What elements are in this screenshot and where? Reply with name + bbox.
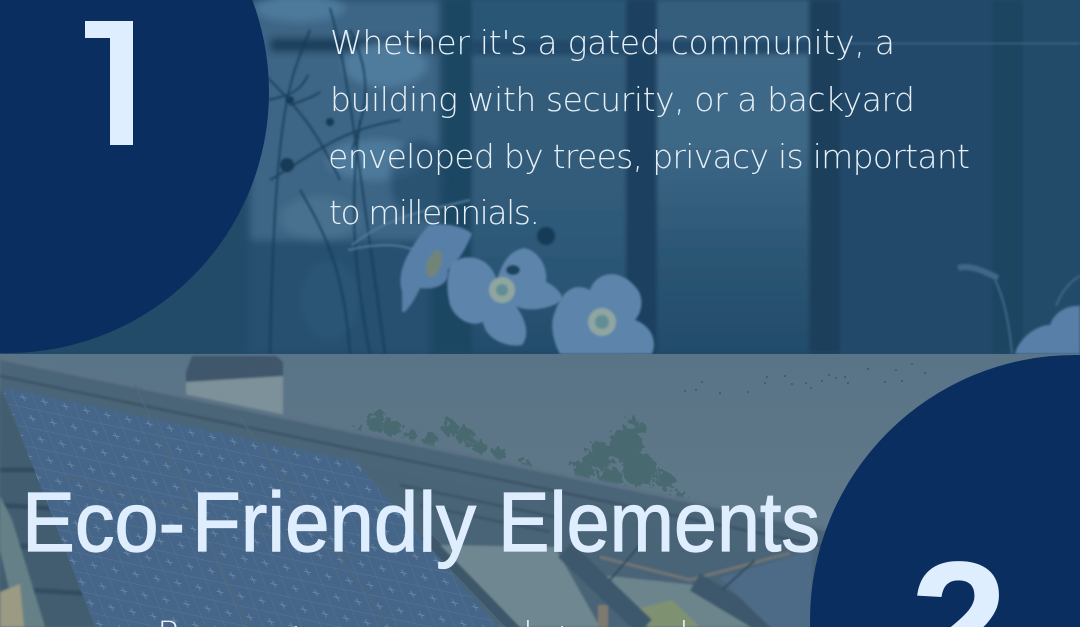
circle: number 2 badge [810, 355, 1080, 627]
flower buds [280, 96, 555, 245]
body text: privacy [328, 23, 970, 232]
pale stem [348, 198, 470, 252]
panel: privacy garden photo [248, 0, 1080, 354]
body text: privacy: Whether it's a gated community, a [330, 23, 895, 62]
heading: eco-friendly elements: Friendly [192, 475, 476, 569]
flower: centre blossom [447, 248, 562, 346]
heading: eco-friendly elements: Elements [498, 475, 820, 569]
heading: eco-friendly elements [22, 475, 820, 569]
solar panels [2, 385, 525, 627]
birds [684, 363, 926, 394]
body text: privacy: building with security, or a backyard [330, 80, 915, 119]
flower: left side blossom [400, 224, 472, 312]
heading: eco-friendly elements: Eco- [22, 475, 185, 569]
body text: privacy: to millennials. [329, 193, 540, 232]
chimney [185, 356, 284, 415]
flower: right blossom [552, 274, 654, 354]
pale background blossoms [250, 0, 450, 354]
body text: privacy: enveloped by trees, privacy is important [328, 137, 970, 176]
flower stems [268, 8, 400, 354]
number 1 [85, 21, 133, 145]
flower: far right blossom [958, 267, 1080, 354]
right roof edge and house wall [400, 484, 812, 627]
circle: number 1 badge [0, 0, 269, 353]
roof [0, 358, 830, 627]
panel: eco-friendly roof photo [0, 354, 1080, 627]
trees [356, 410, 687, 504]
left roof tiles and wall [0, 392, 95, 627]
